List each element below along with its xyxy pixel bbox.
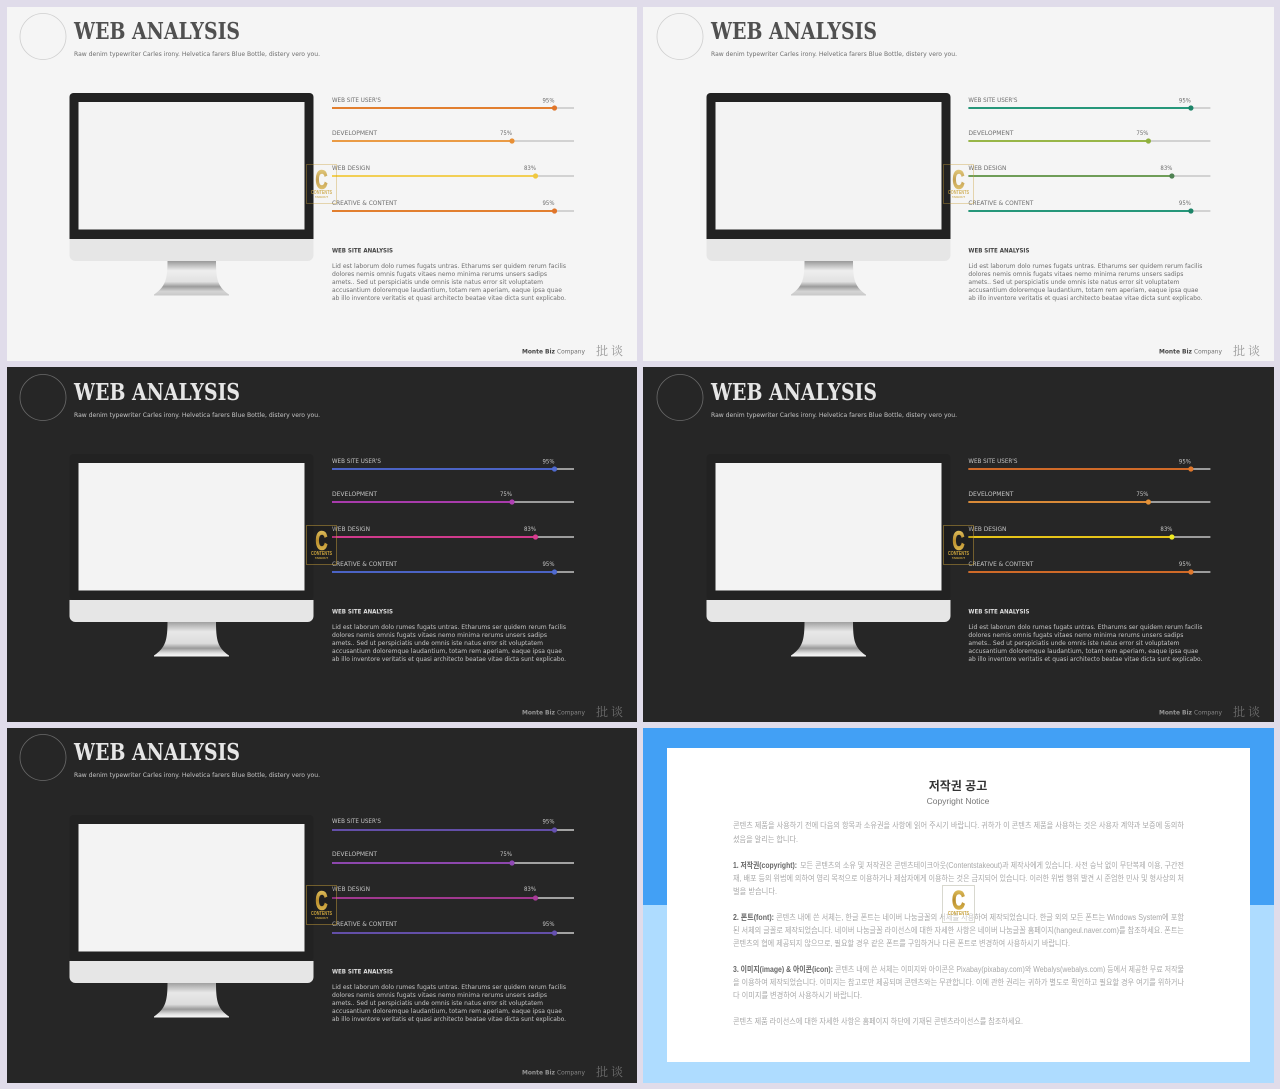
text block: image and icon: 다 이미지를 변경하여 사용하시기 바랍니다. [733,990,862,1000]
icon: desktop monitor [70,93,314,296]
text block: image and icon: 3. 이미지(image) & 아이콘(icon): [733,964,833,974]
icon: gold watermark [306,164,336,204]
bar: web site users: WEB SITE USER'S [968,457,1017,465]
icon: header circle [657,374,703,420]
icon: gold watermark: CONTENTS [311,551,333,557]
footer: company: 批 谈 [1233,342,1260,359]
text block: web site analysis: ab illo inventore veritatis et quasi architecto beatae vitae dicta sunt explicabo. [332,655,566,663]
title: WEB ANALYSIS [710,379,877,406]
icon: gold watermark [306,886,336,924]
chart: progress bars [332,817,574,936]
icon: gold watermark [306,526,336,564]
text block: web site analysis: ab illo inventore veritatis et quasi architecto beatae vitae dicta sunt explicabo. [968,294,1202,302]
text block: web site analysis: Lid est laborum dolo rumes fugats untras. Etharums ser quidem rerum facilis [332,983,567,991]
bar: development [968,129,1210,144]
chart: progress bars [332,96,574,214]
icon: gold watermark: CONTENTS [948,911,970,917]
bar: web design: WEB DESIGN [968,525,1007,533]
bar: web design: WEB DESIGN [332,525,370,533]
chart: progress bars [332,457,574,575]
footer: company: 批 谈 [596,703,623,720]
bar: web design [332,525,574,540]
icon: gold watermark: C [316,526,328,556]
bar: web design [968,164,1210,179]
icon: gold watermark: TAKEOUT [952,556,965,560]
icon: header circle [657,14,703,60]
icon: desktop monitor [706,93,950,296]
bar: web design: 83% [1160,164,1172,172]
icon: header circle [20,14,66,60]
bar: web site users: 95% [542,96,554,104]
bar: web site users: WEB SITE USER'S [968,96,1017,104]
icon: header circle [20,374,66,420]
footer: company: Monte Biz [522,708,555,716]
bar: creative and content: CREATIVE & CONTENT [332,920,397,928]
bar: creative and content [332,920,574,936]
text block: web site analysis: ab illo inventore veritatis et quasi architecto beatae vitae dicta sunt explicabo. [332,294,566,302]
text block: web site analysis: amets.. Sed ut perspiciatis unde omnis iste natus error sit voluptatem [332,278,543,286]
bar: web site users: 95% [542,458,554,466]
bar: web site users: 95% [1179,96,1191,104]
bar: web site users [968,96,1210,111]
bar: development [332,850,574,866]
text block: web site analysis: Lid est laborum dolo rumes fugats untras. Etharums ser quidem rerum facilis [332,262,567,270]
bar: creative and content [968,199,1210,214]
panel: light slide orange [7,7,637,361]
chart: progress bars [968,96,1210,214]
text block: web site analysis: dolores nemis omnis fugats vitaes nemo minima rerums unsers sadips [332,991,548,999]
subtitle: Raw denim typewriter Carles irony. Helvetica farers Blue Bottle, distery vero you. [74,50,320,58]
footer: company: Company [1194,708,1222,716]
bar: web design: WEB DESIGN [332,164,370,172]
text block: copyright: 재, 배포 등의 위법에 의하여 영리 목적으로 이용하거나 제삼자에게 이용하는 것은 금지되어 있습니다. 이러한 위법 행위 발견 시 준엄한 민사 및 형사상의 처 [733,873,1184,883]
bar: creative and content: 95% [542,920,554,928]
icon: header circle [20,734,66,780]
text block: font: 콘텐츠의 협에 제공되지 않으므로, 필요할 경우 같은 폰트를 구입하거나 다른 폰트로 변경하여 사용하시기 바랍니다. [733,938,1070,948]
text block: web site analysis: accusantium doloremque laudantium, totam rem aperiam, eaque ipsa quae [332,1007,562,1015]
bar: creative and content: CREATIVE & CONTENT [332,560,397,568]
panel: copyright notice [643,728,1274,1083]
subtitle: Raw denim typewriter Carles irony. Helvetica farers Blue Bottle, distery vero you. [711,50,957,58]
text block: web site analysis: ab illo inventore veritatis et quasi architecto beatae vitae dicta sunt explicabo. [968,655,1202,663]
text block: web site analysis: WEB SITE ANALYSIS [968,608,1030,616]
panel: dark slide blue and magenta [7,367,637,722]
text block: font: 된 서체의 글꼴로 제작되었습니다. 네이버 나눔글꼴 라이선스에 대한 자세한 사항은 네이버 나눔글꼴 홈페이지(hangeul.naver.com)를 참조하세요. 폰트는 [733,925,1184,935]
text block: web site analysis: WEB SITE ANALYSIS [332,968,393,976]
text block: web site analysis: amets.. Sed ut perspiciatis unde omnis iste natus error sit voluptatem [968,639,1179,647]
bar: web site users: WEB SITE USER'S [332,817,381,825]
subtitle: Raw denim typewriter Carles irony. Helvetica farers Blue Bottle, distery vero you. [74,411,320,419]
text block: web site analysis: dolores nemis omnis fugats vitaes nemo minima rerums unsers sadips [968,631,1184,639]
bar: creative and content: 95% [542,560,554,568]
panel: light slide green [643,7,1274,361]
bar: development [332,129,574,144]
text block: web site analysis: accusantium doloremque laudantium, totam rem aperiam, eaque ipsa quae [332,286,562,294]
bar: creative and content [968,560,1210,575]
text block: web site analysis [968,246,1203,302]
icon: gold watermark: TAKEOUT [315,556,328,560]
footer: company: 批 谈 [1233,703,1260,720]
bar: web design: 83% [524,164,536,172]
footer: company [1159,342,1260,359]
bar: web design: 83% [524,525,536,533]
bar: web site users [332,457,574,472]
bar: creative and content: CREATIVE & CONTENT [968,560,1033,568]
text block: web site analysis: accusantium doloremque laudantium, totam rem aperiam, eaque ipsa quae [968,286,1198,294]
bar: web design: WEB DESIGN [332,885,370,893]
bar: creative and content: 95% [1179,199,1191,207]
title: WEB ANALYSIS [73,18,240,45]
heading: copyright notice [927,778,990,806]
heading: copyright notice: Copyright Notice [927,796,990,806]
footer: company: Monte Biz [522,1068,555,1076]
text block: web site analysis: Lid est laborum dolo rumes fugats untras. Etharums ser quidem rerum facilis [968,262,1203,270]
icon: desktop monitor [70,454,314,656]
bar: development: DEVELOPMENT [332,129,377,137]
bar: web site users [332,96,574,111]
text block: font: 콘텐츠 내에 쓴 서체는, 한글 폰트는 네이버 나눔글꼴의 서체를 사용하여 제작되었습니다. 한글 외의 모든 폰트는 Windows System에 포함 [776,912,1185,922]
icon: desktop monitor [706,454,950,656]
text block: web site analysis: Lid est laborum dolo rumes fugats untras. Etharums ser quidem rerum facilis [332,623,567,631]
bar: development: 75% [1136,129,1148,137]
text block: introduction [733,820,1185,844]
bar: creative and content: 95% [1179,560,1191,568]
footer: company: 批 谈 [596,1063,623,1080]
footer: company [522,342,623,359]
text block: copyright: 벌을 받습니다. [733,886,777,896]
footer: company: Monte Biz [1159,348,1192,356]
text block: web site analysis: WEB SITE ANALYSIS [332,608,393,616]
bar: web design: WEB DESIGN [968,164,1007,172]
text block: image and icon [733,964,1185,1000]
text block: web site analysis: accusantium doloremque laudantium, totam rem aperiam, eaque ipsa quae [968,647,1198,655]
title: WEB ANALYSIS [73,379,240,406]
text block: web site analysis: amets.. Sed ut perspiciatis unde omnis iste natus error sit voluptatem [332,999,543,1007]
bar: development: DEVELOPMENT [968,490,1013,498]
bar: development: DEVELOPMENT [968,129,1013,137]
icon: gold watermark: C [316,164,328,194]
bar: development: 75% [1136,490,1148,498]
bar: development: 75% [500,850,512,858]
bar: web site users: 95% [1179,458,1191,466]
title: WEB ANALYSIS [710,18,877,45]
text block: font: 2. 폰트(font): [733,913,774,922]
icon: desktop monitor [70,815,314,1018]
subtitle: Raw denim typewriter Carles irony. Helvetica farers Blue Bottle, distery vero you. [711,411,957,419]
text block: font [733,912,1185,948]
text block: web site analysis [332,608,567,663]
text block: web site analysis: WEB SITE ANALYSIS [968,246,1030,254]
text block: web site analysis: Lid est laborum dolo rumes fugats untras. Etharums ser quidem rerum facilis [968,623,1203,631]
bar: creative and content: CREATIVE & CONTENT [968,199,1033,207]
footer: company: Monte Biz [522,348,555,356]
footer: company: Company [557,708,585,716]
bar: creative and content: 95% [542,199,554,207]
icon: gold watermark: C [316,886,328,916]
bar: web site users [332,817,574,833]
bar: web site users: WEB SITE USER'S [332,457,381,465]
text block: image and icon: 을 이용하여 제작되었습니다. 이미지는 참고로만 제공되며 콘텐츠와는 무관합니다. 이에 관한 권리는 귀하가 별도로 확인하고 필요할 경우 여기를 위하거나 [733,977,1185,987]
text block: web site analysis: amets.. Sed ut perspiciatis unde omnis iste natus error sit voluptatem [332,639,543,647]
icon: gold watermark: CONTENTS [948,551,970,557]
text block: copyright: 모든 콘텐츠의 소유 및 저작권은 콘텐츠테이크아웃(Contentstakeout)과 제작사에게 있습니다. 사전 승낙 없이 무단복제 이용, 구간전 [800,860,1184,870]
bar: development [968,490,1210,505]
text block: web site analysis: ab illo inventore veritatis et quasi architecto beatae vitae dicta sunt explicabo. [332,1015,566,1023]
icon: gold watermark: TAKEOUT [315,916,328,920]
bar: web design: 83% [524,885,536,893]
bar: development: 75% [500,490,512,498]
icon: gold watermark: TAKEOUT [952,195,965,199]
icon: gold watermark: TAKEOUT [315,195,328,199]
panel: dark slide orange and yellow [643,367,1274,722]
icon: gold watermark: CONTENTS [948,190,970,196]
title: WEB ANALYSIS [73,739,240,766]
bar: creative and content [332,199,574,214]
icon: gold watermark [944,526,974,564]
bar: creative and content: CREATIVE & CONTENT [332,199,397,207]
bar: web design [332,164,574,179]
text block: web site analysis: accusantium doloremque laudantium, totam rem aperiam, eaque ipsa quae [332,647,562,655]
text block: copyright [733,860,1184,896]
footer: company: Company [557,1068,585,1076]
text block: web site analysis: WEB SITE ANALYSIS [332,246,393,254]
notice card [667,748,1250,1062]
text block: introduction: 콘텐츠 제품을 사용하기 전에 다음의 항목과 소유권을 사항에 읽어 주시기 바랍니다. 귀하가 이 콘텐츠 제품을 사용하는 것은 사용자 계약과 보증에 동의하 [733,820,1185,830]
bar: web design [968,525,1210,540]
footer: company [1159,703,1260,720]
footer: company: Company [557,348,585,356]
icon: gold watermark: C [952,885,965,915]
icon: gold watermark [942,885,974,922]
bar: development [332,490,574,505]
icon: gold watermark: CONTENTS [311,190,333,196]
text block: web site analysis: amets.. Sed ut perspiciatis unde omnis iste natus error sit voluptatem [968,278,1179,286]
bar: development: DEVELOPMENT [332,850,377,858]
text block: web site analysis [332,968,567,1023]
footer: company [522,703,623,720]
text block: copyright: 1. 저작권(copyright): [733,860,797,870]
bar: web site users: 95% [542,818,554,826]
bar: web design [332,885,574,901]
bar: development: DEVELOPMENT [332,490,377,498]
bar: development: 75% [500,129,512,137]
panel: dark slide purple [7,728,637,1083]
icon: gold watermark: C [952,526,965,556]
text block: image and icon: 콘텐츠 내에 쓴 서체는 이미지와 아이콘은 Pixabay(pixabay.com)와 Webalys(webalys.com) 등에서 제공한 무료 저작물 [835,964,1184,974]
text block: web site analysis: dolores nemis omnis fugats vitaes nemo minima rerums unsers sadips [968,270,1184,278]
footer: company: Company [1194,348,1222,356]
bar: web site users: WEB SITE USER'S [332,96,381,104]
chart: progress bars [968,457,1210,575]
footer: company: Monte Biz [1159,708,1192,716]
icon: gold watermark: C [952,164,965,194]
text block: web site analysis [968,608,1203,663]
footer: company [522,1063,623,1080]
text block: license note: 콘텐츠 제품 라이선스에 대한 자세한 사항은 홈페이지 하단에 기재된 콘텐츠라이선스를 참조하세요. [733,1016,1023,1026]
text block: web site analysis: dolores nemis omnis fugats vitaes nemo minima rerums unsers sadips [332,270,548,278]
text block: web site analysis: dolores nemis omnis fugats vitaes nemo minima rerums unsers sadips [332,631,548,639]
bar: creative and content [332,560,574,575]
icon: gold watermark [944,164,974,204]
bar: web design: 83% [1160,525,1172,533]
text block: introduction: 셨음을 알리는 합니다. [733,834,798,844]
heading: copyright notice: 저작권 공고 [929,778,987,793]
footer: company: 批 谈 [596,342,623,359]
text block: web site analysis [332,246,567,302]
icon: gold watermark: CONTENTS [311,911,333,917]
subtitle: Raw denim typewriter Carles irony. Helvetica farers Blue Bottle, distery vero you. [74,771,320,779]
bar: web site users [968,457,1210,472]
